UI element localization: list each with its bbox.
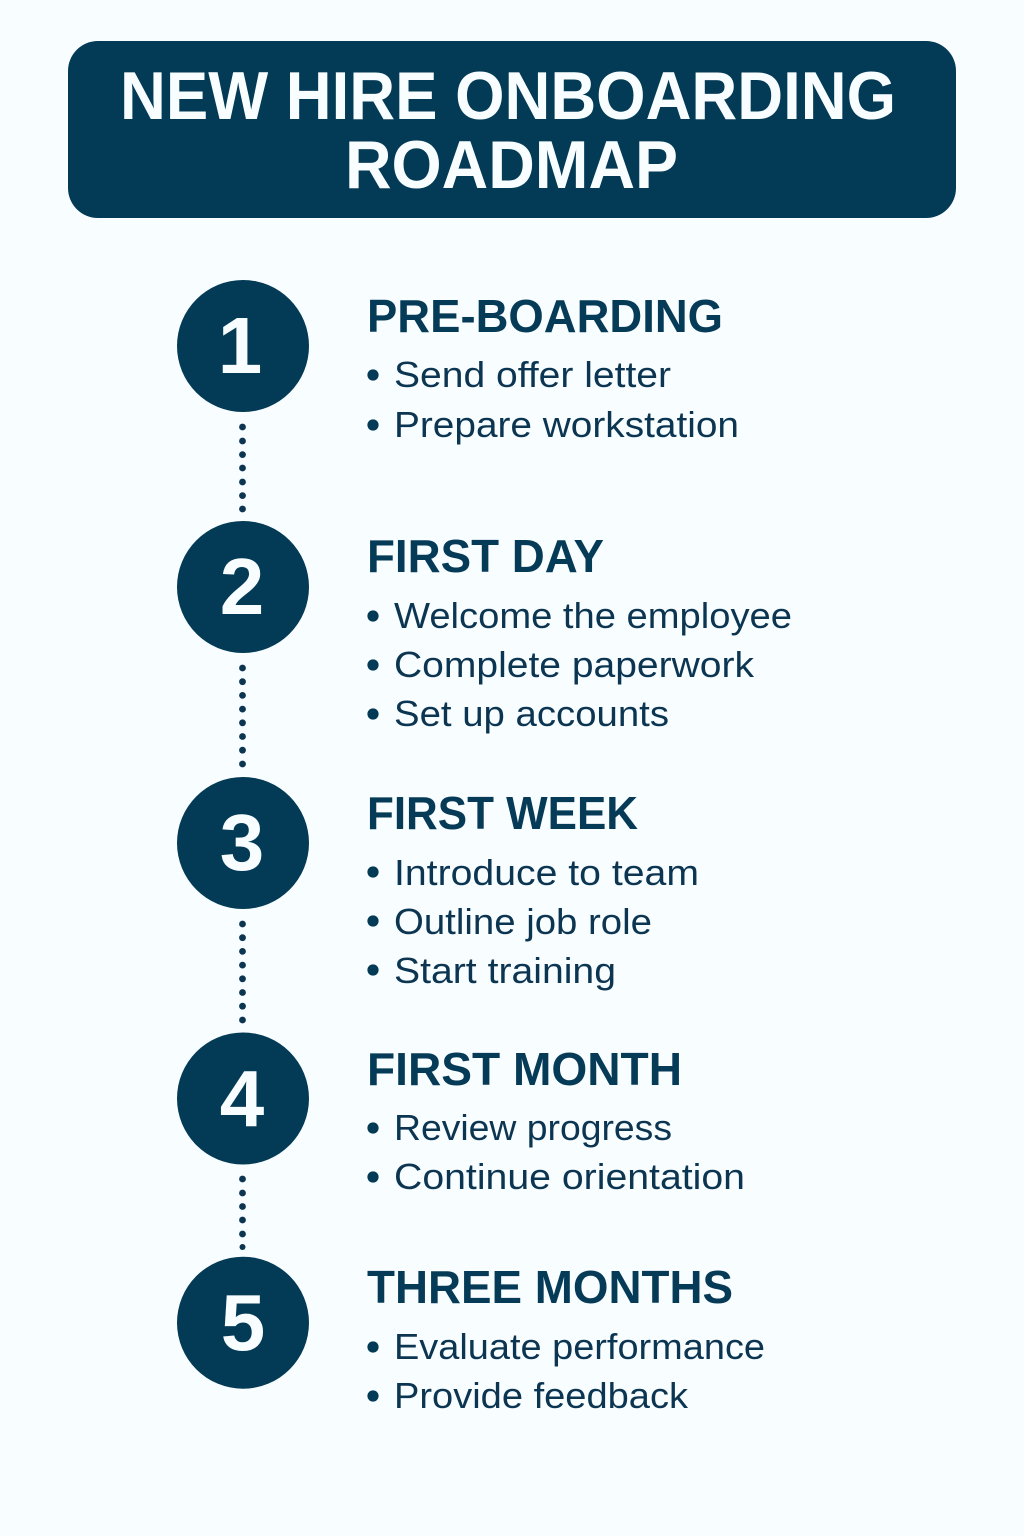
step 2 text: first day xyxy=(367,530,792,734)
step 4 text: first month xyxy=(367,1043,745,1197)
step 1 marker xyxy=(177,280,309,412)
connector 2 to 3 xyxy=(239,665,246,767)
step 5 text: three months: Evaluate performance xyxy=(394,1326,765,1367)
step 3 text: first week: Outline job role xyxy=(394,901,652,942)
step 5 marker: 5 xyxy=(221,1278,265,1367)
step 2 text: first day: FIRST DAY xyxy=(367,530,604,582)
step 5 text: three months: THREE MONTHS xyxy=(367,1261,733,1313)
step 3 text: first week: Start training xyxy=(394,950,616,991)
step 2 text: first day: Set up accounts xyxy=(394,693,669,734)
step 3 marker: 3 xyxy=(220,798,264,887)
step 3 text: first week xyxy=(367,787,699,991)
step 1 marker: 1 xyxy=(218,301,262,390)
step 4 marker: 4 xyxy=(220,1054,265,1143)
step 3 text: first week: FIRST WEEK xyxy=(367,787,638,839)
step 3 marker xyxy=(177,777,309,909)
step 3 text: first week: Introduce to team xyxy=(394,852,699,893)
step 4 text: first month: FIRST MONTH xyxy=(367,1043,682,1095)
step 2 marker: 2 xyxy=(220,542,264,631)
step 2 marker xyxy=(177,521,309,653)
connector 3 to 4 xyxy=(239,921,246,1023)
step 5 marker xyxy=(177,1257,309,1389)
step 4 marker xyxy=(177,1032,309,1164)
step 1 text: pre-boarding: Send offer letter xyxy=(394,354,671,395)
step 2 text: first day: Welcome the employee xyxy=(394,595,792,636)
step 5 text: three months: Provide feedback xyxy=(394,1375,689,1416)
step 1 text: pre-boarding xyxy=(367,290,739,445)
title xyxy=(120,58,896,203)
title: NEW HIRE ONBOARDING xyxy=(120,58,896,134)
step 4 text: first month: Continue orientation xyxy=(394,1156,745,1197)
step 4 text: first month: Review progress xyxy=(394,1107,672,1148)
connector 4 to 5 xyxy=(239,1176,246,1250)
step 1 text: pre-boarding: PRE-BOARDING xyxy=(367,290,723,342)
step 5 text: three months xyxy=(367,1261,765,1416)
title banner xyxy=(68,41,956,218)
step 2 text: first day: Complete paperwork xyxy=(394,644,755,685)
connector 1 to 2 xyxy=(239,424,246,512)
title: ROADMAP xyxy=(345,127,678,203)
step 1 text: pre-boarding: Prepare workstation xyxy=(394,404,739,445)
